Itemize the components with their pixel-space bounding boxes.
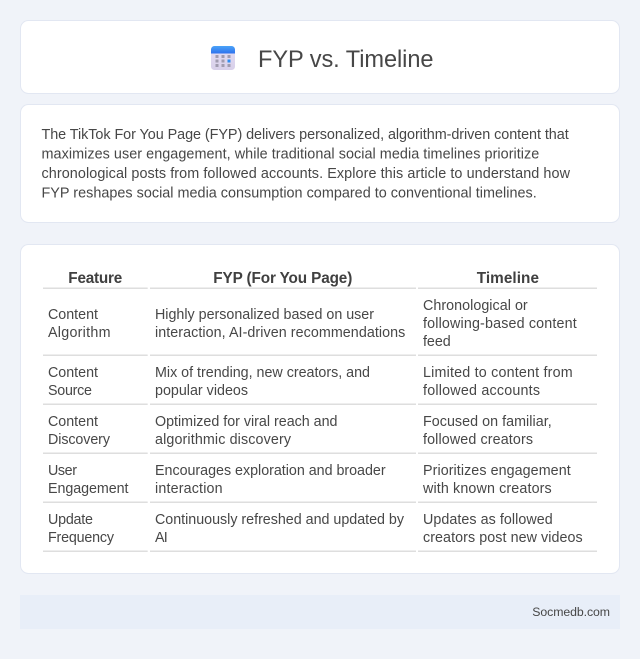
row: content algorithm: Highly personalized based on user — [155, 307, 374, 323]
row: content source: Mix of trending, new creators, and — [155, 365, 370, 381]
title: FYP vs. Timeline — [258, 47, 434, 73]
footer bar — [20, 595, 620, 629]
row: update frequency — [48, 512, 583, 546]
row: user engagement: with known creators — [422, 481, 552, 497]
panel: title card — [20, 20, 620, 94]
table rules — [43, 288, 597, 552]
row: content discovery: algorithmic discovery — [155, 432, 292, 448]
intro paragraph: chronological posts from followed accounts. Explore this article to understand how — [42, 166, 571, 182]
row: content source: followed accounts — [423, 383, 540, 399]
row: update frequency: Updates as followed — [423, 512, 553, 528]
intro paragraph: FYP reshapes social media consumption compared to conventional timelines. — [42, 186, 537, 202]
row: user engagement: interaction — [155, 481, 223, 497]
row: update frequency: Frequency — [48, 530, 115, 546]
intro paragraph: The TikTok For You Page (FYP) delivers personalized, algorithm-driven content that — [42, 127, 569, 143]
panel: comparison table — [20, 244, 620, 574]
row: content algorithm: interaction, AI-driven recommendations — [155, 325, 405, 341]
row: user engagement: Engagement — [48, 481, 129, 497]
table header row — [68, 270, 539, 287]
row: user engagement — [48, 463, 571, 497]
icon: calendar — [211, 46, 235, 70]
row: content source: Source — [48, 383, 92, 399]
row: content source — [48, 365, 573, 399]
row: content algorithm: feed — [423, 334, 451, 350]
row: content discovery: Optimized for viral reach and — [155, 414, 338, 430]
row: user engagement: User — [48, 463, 77, 479]
row: content discovery: followed creators — [423, 432, 533, 448]
row: content algorithm: following-based content — [423, 316, 577, 332]
row: content discovery: Focused on familiar, — [423, 414, 552, 430]
row: update frequency: AI — [155, 530, 168, 546]
row: user engagement: Encourages exploration and broader — [155, 463, 386, 479]
table header row: FYP (For You Page) — [213, 270, 352, 287]
row: content source: popular videos — [155, 383, 248, 399]
row: content algorithm — [48, 298, 577, 350]
row: content algorithm: Algorithm — [48, 325, 110, 341]
intro paragraph: maximizes user engagement, while traditional social media timelines prioritize — [42, 146, 539, 162]
footer credit: Socmedb.com — [532, 605, 610, 619]
row: content discovery — [48, 414, 552, 448]
row: content algorithm: Content — [48, 307, 98, 323]
row: user engagement: Prioritizes engagement — [423, 463, 571, 479]
row: update frequency: Update — [48, 512, 93, 528]
panel: intro text — [20, 104, 620, 222]
table header row: Feature — [68, 270, 122, 287]
row: content algorithm: Chronological or — [423, 298, 528, 314]
intro paragraph — [42, 127, 571, 202]
row: update frequency: Continuously refreshed and updated by — [155, 512, 405, 528]
row: content source: Content — [48, 365, 98, 381]
row: content source: Limited to content from — [423, 365, 573, 381]
row: update frequency: creators post new videos — [423, 530, 583, 546]
row: content discovery: Discovery — [48, 432, 111, 448]
table header row: Timeline — [477, 270, 539, 287]
row: content discovery: Content — [48, 414, 98, 430]
